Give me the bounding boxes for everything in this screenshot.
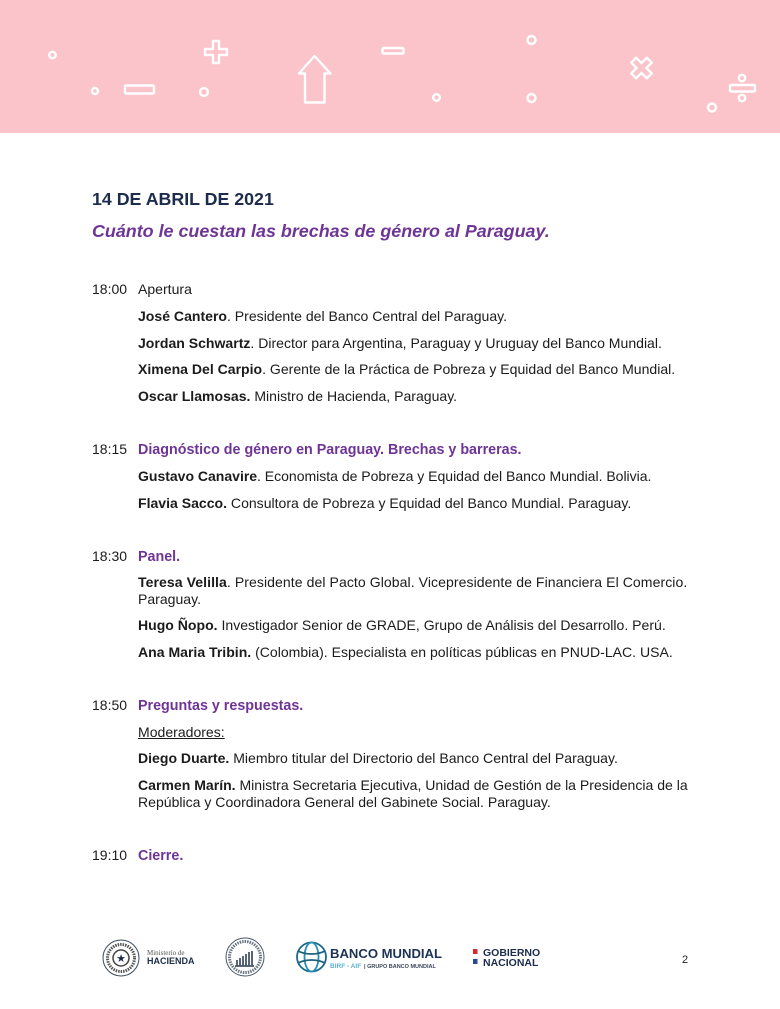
logo: Gobierno Nacional [473,947,540,969]
logo: Banco Central [226,938,264,976]
logo: Ministerio de Hacienda [102,940,195,976]
logo: Banco Mundial: | GRUPO BANCO MUNDIAL [364,964,436,970]
agenda: apertura: Oscar Llamosas. Ministro de Hacienda, Paraguay. [138,388,457,404]
agenda: preguntas: Moderadores: [138,724,225,740]
agenda: panel: Teresa Velilla. Presidente del Pacto Global. Vicepresidente de Financiera El Comercio. [138,574,687,590]
logo: Gobierno Nacional: GOBIERNO [483,947,540,959]
agenda: diagnostico [92,441,651,511]
agenda: preguntas: Diego Duarte. Miembro titular del Directorio del Banco Central del Paraguay. [138,750,618,766]
agenda: preguntas [92,697,688,810]
agenda: preguntas: 18:50 [92,697,127,713]
agenda: apertura: 18:00 [92,281,127,297]
icon: divide [730,75,755,101]
logo: Ministerio de Hacienda: ★ [116,953,126,965]
icon: plus [205,41,227,63]
page number: 2 [682,954,688,966]
header band with math icons [0,0,780,133]
icon: minus left [125,86,154,94]
agenda: cierre: 19:10 [92,847,127,863]
agenda: cierre [92,847,183,864]
subtitle: Cuánto le cuestan las brechas de género al Paraguay. [92,221,550,241]
agenda: apertura: Jordan Schwartz. Director para Argentina, Paraguay y Uruguay del Banco Mundial. [138,335,662,351]
agenda: preguntas: Carmen Marín. Ministra Secretaria Ejecutiva, Unidad de Gestión de la Presidencia de la [138,777,688,793]
agenda: preguntas: República y Coordinadora General del Gabinete Social. Paraguay. [138,794,551,810]
agenda: diagnostico: Gustavo Canavire. Economista de Pobreza y Equidad del Banco Mundial. Bolivia. [138,468,651,484]
agenda: diagnostico: Flavia Sacco. Consultora de Pobreza y Equidad del Banco Mundial. Paraguay. [138,495,631,511]
agenda: panel: Panel. [138,549,180,565]
logo: Ministerio de Hacienda: Ministerio de [147,949,185,957]
agenda: cierre: Cierre. [138,848,183,864]
agenda: panel [92,548,687,660]
logo: Banco Mundial [296,942,442,972]
agenda: panel: Paraguay. [138,591,201,607]
logo: Banco Mundial: BANCO MUNDIAL [330,946,442,961]
agenda: apertura: Ximena Del Carpio. Gerente de la Práctica de Pobreza y Equidad del Banco Mundial. [138,361,675,377]
logo: Gobierno Nacional: NACIONAL [483,957,539,969]
icon: times [626,52,657,84]
agenda: diagnostico: 18:15 [92,441,127,457]
agenda: panel: Hugo Ñopo. Investigador Senior de GRADE, Grupo de Análisis del Desarrollo. Perú. [138,617,666,633]
agenda: apertura [92,281,675,404]
icon: small circles [49,36,716,112]
agenda: panel: 18:30 [92,548,127,564]
logo: Banco Mundial: BIRF - AIF [330,963,361,970]
agenda: panel: Ana Maria Tribin. (Colombia). Especialista en políticas públicas en PNUD-LAC. USA. [138,644,673,660]
agenda: apertura: José Cantero. Presidente del Banco Central del Paraguay. [138,308,507,324]
agenda: diagnostico: Diagnóstico de género en Paraguay. Brechas y barreras. [138,442,522,458]
date heading: 14 DE ABRIL DE 2021 [92,189,274,209]
agenda: preguntas: Preguntas y respuestas. [138,698,303,714]
logo: Ministerio de Hacienda: HACIENDA [147,956,195,966]
icon: up arrow [299,56,330,102]
icon: minus centre [382,48,404,54]
agenda: apertura: Apertura [138,281,192,297]
